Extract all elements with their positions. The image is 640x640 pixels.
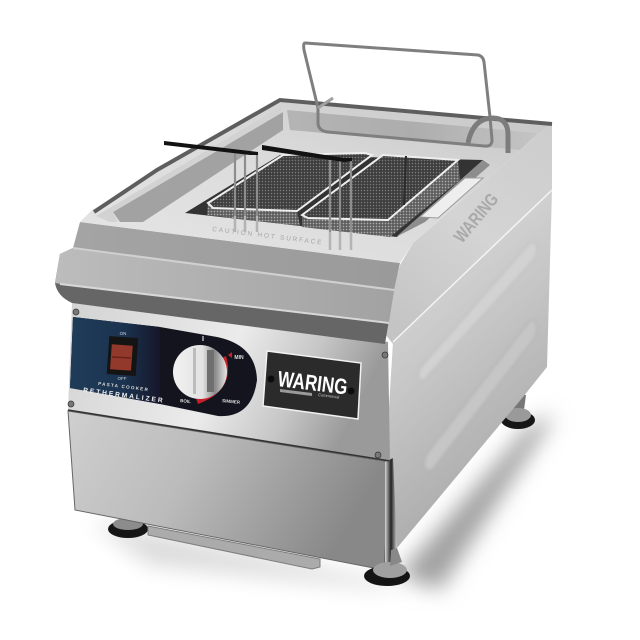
deck caption: CAUTION HOT SURFACE xyxy=(212,226,322,246)
control panel decal: RETHERMALIZER xyxy=(83,387,163,404)
control panel decal: PASTA COOKER xyxy=(98,381,149,392)
side seam xyxy=(393,190,552,342)
Waring badge: Commercial xyxy=(318,392,340,400)
Waring badge: WARING xyxy=(276,366,349,399)
knob xyxy=(173,336,227,399)
screws xyxy=(68,309,388,458)
red temperature arc xyxy=(196,356,228,404)
basket: left xyxy=(207,153,372,226)
control panel decal: OFF xyxy=(118,376,127,381)
gooseneck faucet xyxy=(468,118,508,153)
control panel decal xyxy=(70,317,257,416)
basket: right xyxy=(302,155,460,237)
foot: rear right xyxy=(501,395,535,429)
basket inner divider xyxy=(404,156,406,205)
knob labels: BOIL xyxy=(180,398,191,404)
foot: front right xyxy=(364,548,410,586)
side vent: lower xyxy=(424,320,537,470)
handle: left basket xyxy=(164,141,258,232)
floor shadow xyxy=(90,415,555,590)
hood xyxy=(55,222,400,344)
deck left trough xyxy=(113,112,283,222)
control panel decal: SIMMER xyxy=(222,398,241,405)
foot: front left xyxy=(108,518,148,538)
kick bar xyxy=(148,526,320,569)
lower box front xyxy=(68,411,390,570)
deck back wall xyxy=(287,110,537,150)
embossed logo on side: WARING xyxy=(450,189,502,247)
wire basket lift frame xyxy=(304,43,492,146)
Waring badge xyxy=(263,351,361,419)
face plate xyxy=(68,303,390,462)
control panel decal: MIN xyxy=(234,355,244,361)
side panel xyxy=(382,123,552,548)
deck rim xyxy=(94,100,552,212)
side vent: upper xyxy=(419,242,537,380)
panel labels: ON xyxy=(120,331,126,336)
drain tray xyxy=(420,178,483,218)
corner strut xyxy=(385,458,397,566)
cooking well xyxy=(185,155,483,237)
handle: right basket xyxy=(262,145,352,250)
top deck xyxy=(80,99,552,263)
rocker switch xyxy=(107,336,138,376)
